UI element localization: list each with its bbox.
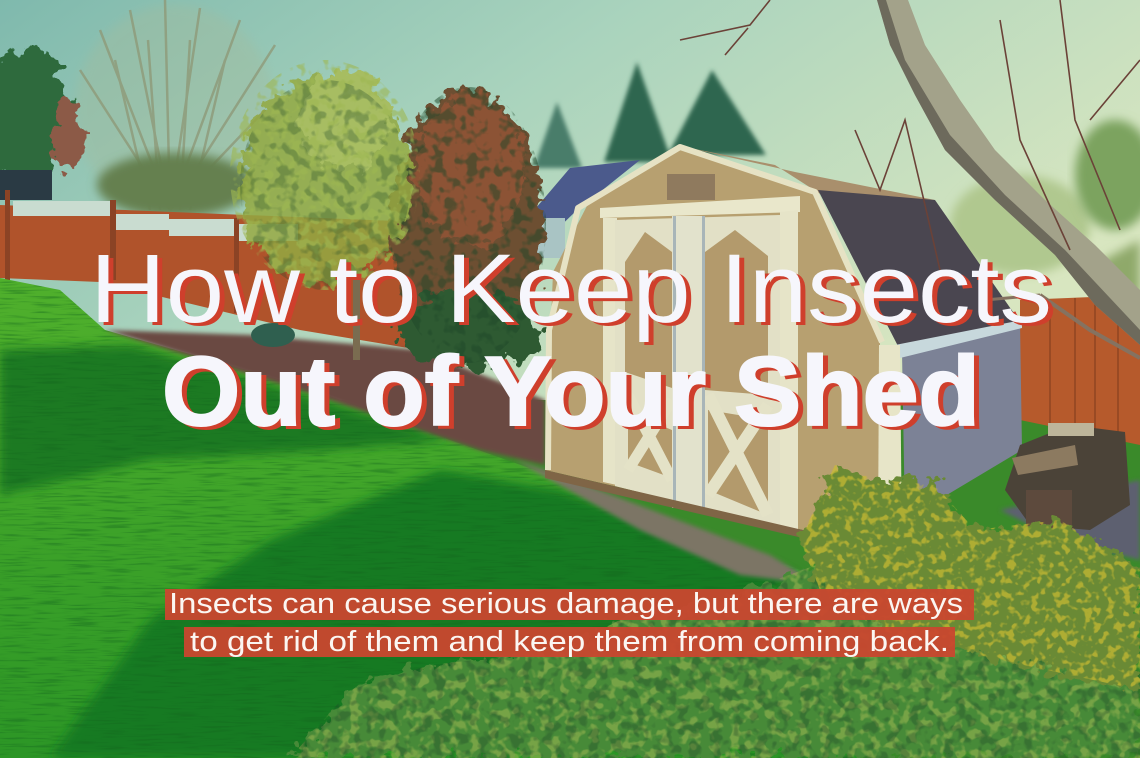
shrub (251, 323, 295, 347)
title (90, 234, 1057, 449)
front wall (545, 150, 880, 548)
gravel and dirt (515, 460, 820, 585)
title line 2: Out of Your Shed (162, 336, 980, 446)
grass texture (0, 278, 860, 758)
lawn shadow areas (0, 345, 450, 495)
foreground bushes (290, 465, 1140, 758)
wooden fence right (1020, 295, 1140, 445)
dark green bush mass (290, 560, 1140, 758)
title line 1 shadow: How to Keep Insects (95, 237, 1057, 346)
subtitle band 2 (184, 627, 955, 657)
skid base (545, 470, 880, 556)
door cross braces (628, 395, 672, 480)
title line 1: How to Keep Insects (90, 234, 1052, 343)
tree trunk (353, 280, 360, 360)
door centre seam (672, 216, 705, 508)
background trees (0, 0, 1140, 300)
lawn (0, 278, 860, 758)
subtitle line 2: to get rid of them and keep them from coming back. (190, 626, 949, 658)
subtitle line 1: Insects can cause serious damage, but there are ways (169, 588, 963, 620)
rear roof shingles light (680, 146, 935, 200)
evergreens (534, 62, 766, 168)
pale foliage right (950, 175, 1090, 275)
shed doors (600, 196, 800, 532)
yellow shrub (800, 465, 1140, 690)
subtitle (165, 588, 974, 658)
wood pile (1005, 423, 1130, 530)
mulch garden bed (105, 330, 545, 465)
front trim (548, 147, 882, 470)
large tree trunk and branches (680, 0, 1140, 358)
title line 2 shadow: Out of Your Shed (167, 339, 985, 449)
sky background (0, 0, 1140, 400)
red-brown tree (390, 87, 546, 370)
side wall (902, 322, 1022, 520)
door panels (625, 232, 672, 388)
bare tree left (75, 0, 275, 217)
dark side roof (818, 190, 1020, 350)
vents (667, 174, 715, 200)
wooden fence left (0, 170, 420, 350)
yellow-green tree (230, 60, 420, 290)
dark tree far left (0, 49, 84, 181)
corner post (878, 345, 902, 552)
central trees (230, 60, 546, 370)
subtitle band 1 (165, 589, 974, 620)
neighbouring house roof (530, 160, 640, 258)
shed (545, 146, 1022, 556)
